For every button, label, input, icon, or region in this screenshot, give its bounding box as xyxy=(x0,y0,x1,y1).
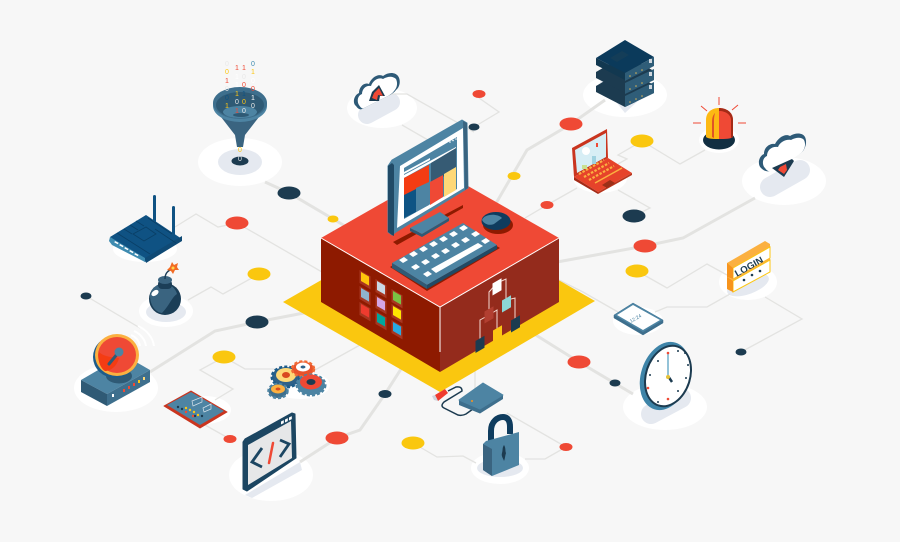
icon: USB device xyxy=(432,383,503,415)
white halos xyxy=(74,73,826,501)
left face xyxy=(321,238,440,372)
falling binary digits: 1 xyxy=(235,108,239,115)
falling binary digits xyxy=(225,61,255,163)
icon: router xyxy=(109,195,182,263)
falling binary digits: 1 xyxy=(235,74,239,81)
icon: alarm beacon xyxy=(693,97,746,150)
computer monitor xyxy=(388,120,468,245)
laptop keys xyxy=(579,160,614,180)
icon: code window xyxy=(243,413,296,491)
icon: gears xyxy=(268,362,325,398)
falling binary digits: 0 xyxy=(242,99,246,106)
falling binary digits: 0 xyxy=(225,69,229,76)
keyboard xyxy=(390,223,500,291)
icon: download cloud xyxy=(759,133,806,177)
gear blue-yellow xyxy=(272,367,300,387)
falling binary digits: 0 xyxy=(238,147,242,154)
falling binary digits: 1 xyxy=(251,95,255,102)
right face xyxy=(440,238,559,372)
gear white-orange xyxy=(292,362,314,376)
falling binary digits: 0 xyxy=(242,82,246,89)
thick connector lines xyxy=(150,100,755,462)
falling binary digits: 0 xyxy=(251,103,255,110)
falling binary digits: 1 xyxy=(242,91,246,98)
password button xyxy=(727,258,770,292)
status lights xyxy=(112,377,145,397)
icon: bomb xyxy=(149,262,181,315)
falling binary digits: 0 xyxy=(242,108,246,115)
halo inner shadows xyxy=(146,70,800,498)
falling binary digits: 0 xyxy=(251,86,255,93)
wifi waves xyxy=(131,326,154,346)
falling binary digits: 0 xyxy=(251,61,255,68)
thin connector lines xyxy=(86,94,802,463)
gear small xyxy=(268,384,288,398)
central red box xyxy=(321,170,559,372)
login button: LOGIN xyxy=(733,255,766,280)
icon: wall clock xyxy=(631,335,700,417)
icon: login panel xyxy=(727,241,770,292)
beacon rays xyxy=(693,97,746,123)
falling binary digits: 0 xyxy=(242,74,246,81)
icon: server stack xyxy=(596,40,654,107)
USB plug xyxy=(432,389,448,401)
falling binary digits: 1 xyxy=(225,103,229,110)
icon: red laptop xyxy=(572,129,632,194)
network nodes xyxy=(80,90,746,451)
falling binary digits: 1 xyxy=(242,65,246,72)
falling binary digits: 1 xyxy=(235,65,239,72)
falling binary digits: 0 xyxy=(235,99,239,106)
falling binary digits: 0 xyxy=(225,61,229,68)
falling binary digits: 0 xyxy=(251,78,255,85)
icon: upload cloud xyxy=(354,73,400,109)
icon: satellite dish on base xyxy=(81,326,154,406)
computer mouse xyxy=(482,212,513,234)
keyboard keys xyxy=(399,225,490,277)
icon: smartphone xyxy=(614,303,663,335)
icon: red tablet xyxy=(164,391,227,428)
gear red-dark xyxy=(297,374,325,395)
falling binary digits: 0 xyxy=(225,86,229,93)
falling binary digits: 1 xyxy=(235,82,239,89)
falling binary digits: 0 xyxy=(225,95,229,102)
falling binary digits: 1 xyxy=(251,69,255,76)
top face xyxy=(321,170,559,307)
flow chart on right face xyxy=(476,278,520,353)
falling binary digits: 0 xyxy=(238,156,242,163)
yellow base diamond xyxy=(283,212,595,392)
monitor screen tiles xyxy=(404,138,457,218)
falling binary digits: 1 xyxy=(235,91,239,98)
funnel base xyxy=(232,156,248,166)
falling binary digits: 1 xyxy=(225,78,229,85)
colour tiles on left face xyxy=(360,270,402,339)
icon: data funnel xyxy=(213,61,267,166)
icon: padlock xyxy=(483,417,519,476)
icon: smartphone: 12:24 xyxy=(629,313,643,325)
